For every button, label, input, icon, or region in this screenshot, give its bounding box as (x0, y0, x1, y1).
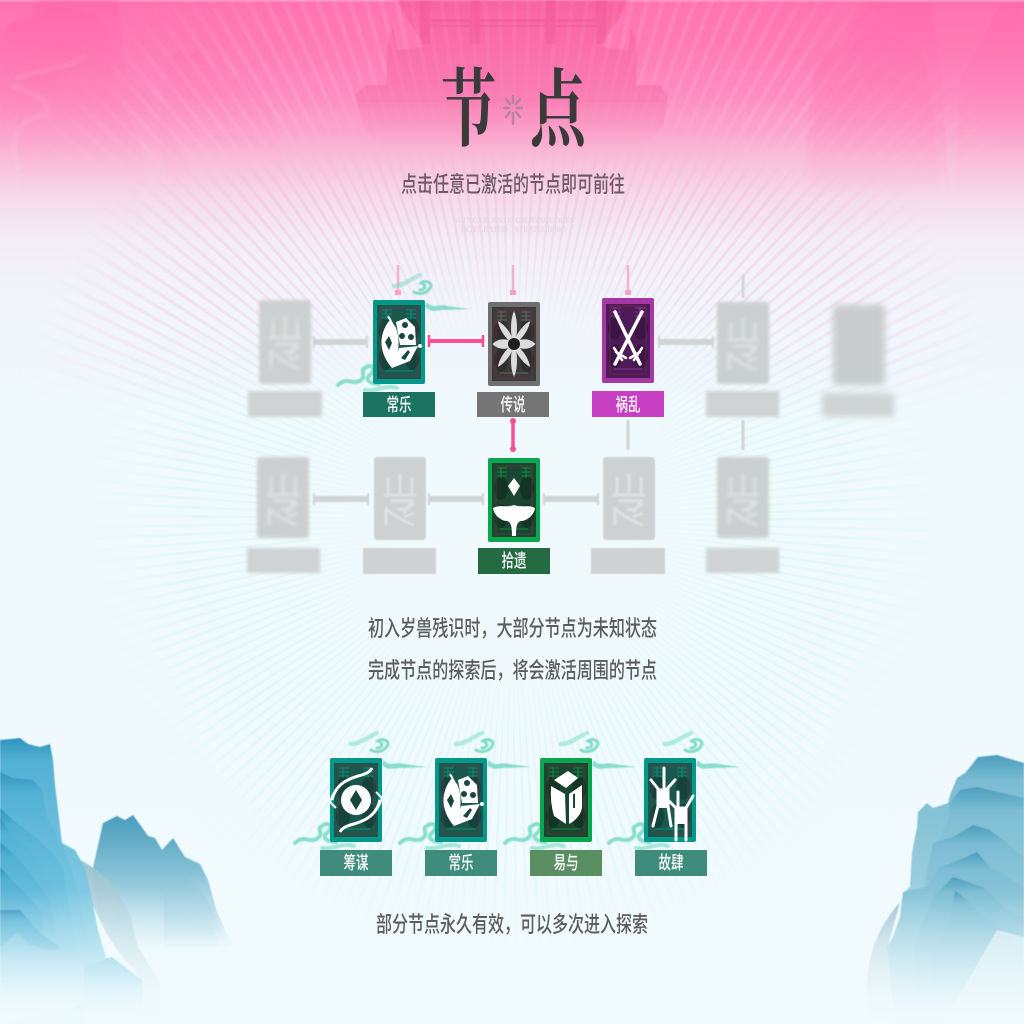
node: locked row 2 col 2 (363, 457, 436, 574)
permanent node: 易与 (505, 733, 637, 876)
permanent node: 筹谋: 筹谋 (344, 853, 368, 873)
explanation text: 完成节点的探索后，将会激活周围的节点 (368, 658, 657, 683)
left blue mountains (0, 738, 232, 1024)
english caption: SUI'S GARDEN OF GROTESQUERIES (454, 216, 574, 225)
icon: dancing figures (651, 768, 693, 840)
title: 点 (530, 43, 589, 164)
node: 拾遗: 拾遗 (502, 551, 526, 571)
node: 传说: 传说 (500, 395, 526, 415)
english caption (454, 216, 574, 234)
permanent node: 常乐: 常乐 (448, 853, 474, 873)
node: locked row 1 col 6 (822, 305, 894, 417)
subtitle: 点击任意已激活的节点即可前往 (401, 172, 625, 197)
node: locked row 2 col 5 (706, 457, 779, 573)
node map connectors (314, 265, 830, 505)
explanation text (368, 616, 657, 683)
permanent node: 故肆: 故肆 (658, 853, 684, 873)
icon: coin and arrows (330, 768, 382, 832)
title: 节 (441, 43, 496, 164)
english caption: INTEGRATED STRATEGIES#5 (461, 225, 566, 234)
icon: flower (493, 311, 535, 377)
icon: lotus (493, 478, 535, 536)
node: 传说 (477, 302, 549, 417)
node: 祸乱: 祸乱 (616, 395, 640, 415)
icon: crossed swords (614, 312, 642, 364)
node: 拾遗 (478, 458, 550, 574)
node: locked row 1 col 1 (248, 300, 322, 417)
permanent node: 筹谋 (295, 733, 427, 876)
title (441, 43, 589, 164)
footer text: 部分节点永久有效，可以多次进入探索 (376, 912, 648, 937)
node: 常乐: 常乐 (386, 395, 412, 415)
icon: star divider (504, 96, 522, 124)
node: 常乐 (338, 275, 470, 417)
permanent node: 故肆 (609, 733, 741, 876)
permanent node: 常乐 (400, 733, 532, 876)
icon: box (554, 771, 578, 788)
top pink mountains (0, 0, 1024, 200)
explanation text: 初入岁兽残识时，大部分节点为未知状态 (368, 616, 657, 641)
right blue mountains (860, 755, 1024, 1024)
temple silhouette (355, 0, 668, 150)
node: locked row 2 col 1 (247, 457, 320, 573)
permanent node: 易与: 易与 (554, 853, 578, 873)
node: locked row 2 col 4 (591, 457, 665, 574)
node: 祸乱 (592, 298, 664, 417)
top edge (0, 0, 1024, 2)
node: locked row 1 col 5 (706, 302, 779, 417)
